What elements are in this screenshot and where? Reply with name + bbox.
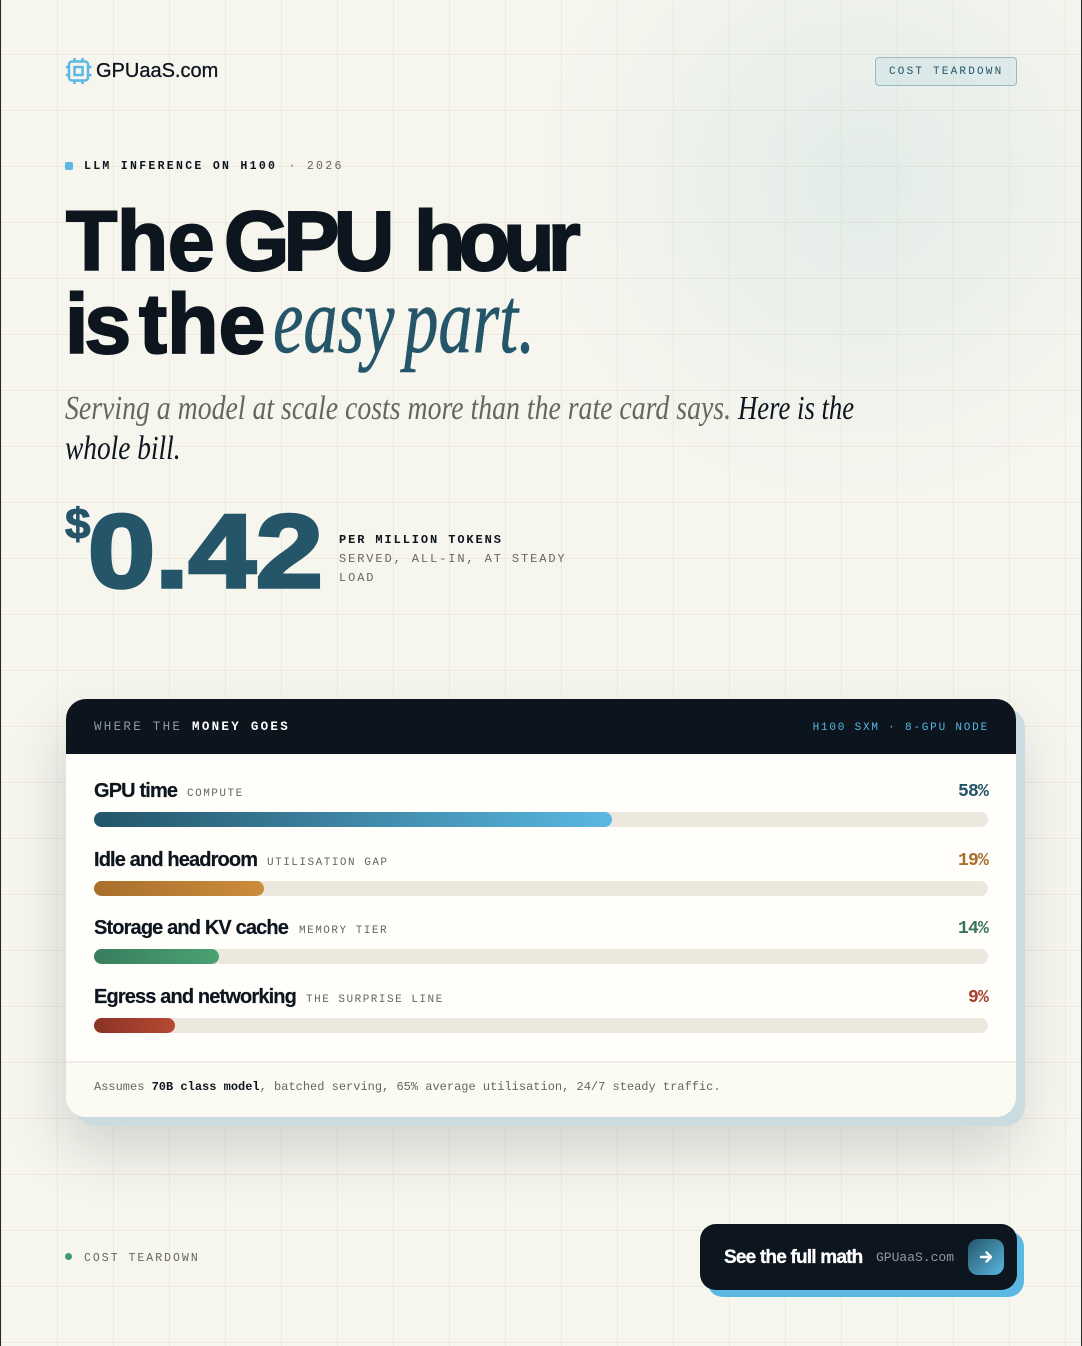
price value: 0.42 (88, 494, 323, 610)
footnote text: Assumes 70B class model, batched serving, 65% average utilisation, 24/7 steady traffic. (94, 1080, 721, 1094)
row percent: 14% (958, 919, 988, 939)
row: storage and KV cache (94, 917, 989, 964)
title line one: hour (414, 194, 574, 288)
row percent: 9% (968, 988, 988, 1008)
caption strong: PER MILLION TOKENS (339, 533, 503, 547)
tag: cost teardown (875, 57, 1017, 86)
header title: WHERE THE MONEY GOES (94, 720, 290, 734)
caption detail: LOAD (339, 571, 375, 585)
dollar sign: $ (65, 500, 90, 549)
row: GPU time (94, 780, 989, 827)
icon: blue square (65, 162, 73, 170)
row label: Idle and headroom (94, 849, 257, 871)
button label: See the full math (724, 1247, 862, 1268)
row label: GPU time (94, 780, 177, 802)
title line two: the (139, 277, 266, 371)
big price (65, 494, 323, 610)
title (65, 194, 580, 373)
row percent: 58% (958, 782, 988, 802)
tag: cost teardown: COST TEARDOWN (889, 66, 1003, 78)
title line two (65, 277, 266, 371)
subtitle (65, 390, 854, 467)
header spec: H100 SXM · 8-GPU NODE (813, 722, 989, 734)
bar (94, 949, 988, 964)
title line two: is (65, 277, 127, 371)
call to action button (700, 1224, 1017, 1290)
icon: arrow (968, 1239, 1004, 1275)
subtitle line two: whole bill. (65, 430, 181, 467)
row: idle and headroom (94, 849, 989, 896)
row tag: COMPUTE (187, 788, 244, 800)
panel: where the money goes (66, 699, 1016, 1117)
row label: Egress and networking (94, 986, 296, 1008)
row tag: UTILISATION GAP (267, 857, 389, 869)
title line one: The (66, 194, 214, 288)
panel header (66, 699, 1016, 754)
row: egress and networking (94, 986, 989, 1033)
title line one: GPU (224, 194, 389, 288)
bar (94, 1018, 988, 1033)
panel footnote (66, 1061, 1016, 1117)
footer tag text: COST TEARDOWN (84, 1252, 200, 1265)
footer tag (65, 1252, 200, 1265)
subtitle line one: Serving a model at scale costs more than the rate card says. (65, 390, 731, 427)
row tag: MEMORY TIER (299, 925, 388, 937)
eyebrow (65, 160, 344, 173)
subtitle line one emphasis: Here is the (738, 390, 854, 427)
brand logo (66, 58, 218, 84)
caption detail: SERVED, ALL-IN, AT STEADY (339, 552, 567, 566)
eyebrow text: LLM INFERENCE ON H100 · 2026 (84, 160, 344, 173)
bar (94, 881, 988, 896)
title line one (66, 194, 580, 288)
title accent: easy part. (273, 269, 535, 373)
icon: chip (66, 58, 92, 84)
row label: Storage and KV cache (94, 917, 288, 939)
brand name: GPUaaS.com (96, 60, 218, 82)
caption detail (339, 552, 567, 585)
row percent: 19% (958, 851, 988, 871)
row tag: THE SURPRISE LINE (306, 994, 444, 1006)
bar (94, 812, 988, 827)
icon: green dot (65, 1253, 72, 1260)
button domain: GPUaaS.com (876, 1250, 954, 1265)
price caption (339, 533, 567, 585)
